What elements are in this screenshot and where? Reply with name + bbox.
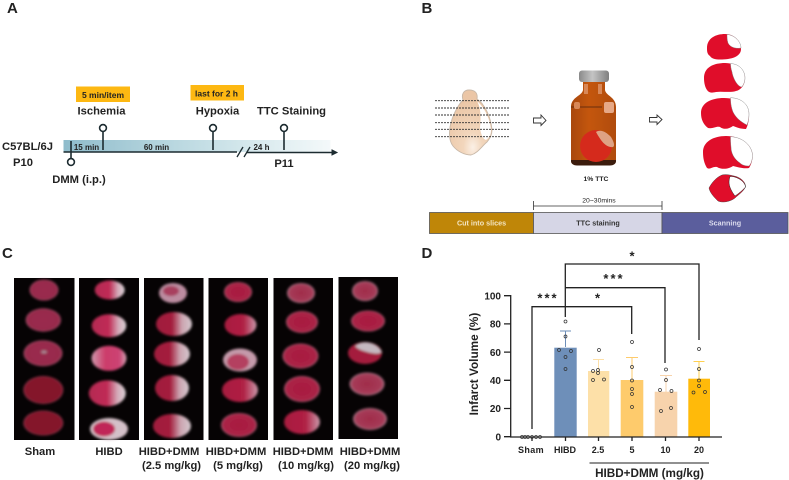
timeline labels: DMM (i.p.) (52, 174, 106, 186)
x tick labels: HIBD (554, 445, 576, 455)
group labels: (20 mg/kg) (344, 460, 400, 472)
arrow: to scans (650, 115, 662, 124)
group labels: HIBD (95, 446, 123, 458)
timeline labels: 24 h (253, 143, 270, 152)
slice 2 (704, 63, 745, 93)
timeline labels: Ischemia (78, 106, 126, 118)
photo column: HIBD+DMM 10 mg/kg (274, 278, 333, 440)
step: cut into slices (430, 212, 534, 234)
step: scanning: Scanning (709, 218, 741, 228)
x tick labels: 2.5 (592, 445, 604, 455)
group labels: (10 mg/kg) (278, 460, 334, 472)
timeline labels: 15 min (74, 143, 99, 152)
duration bracket (534, 198, 662, 210)
callout: last for 2 h (190, 85, 244, 100)
icon: whole brain with slicing lines (435, 90, 509, 155)
data points (520, 320, 706, 438)
photo column: Sham (14, 278, 74, 440)
group labels: HIBD+DMM (340, 446, 400, 458)
y tick labels: 100 (484, 292, 501, 302)
significance stars: *** (537, 290, 559, 306)
group labels: HIBD+DMM (206, 446, 266, 458)
photo column: HIBD+DMM 2.5 mg/kg (144, 278, 204, 440)
group labels: HIBD+DMM (273, 446, 333, 458)
timeline labels: 60 min (144, 143, 169, 152)
error bars (560, 331, 704, 392)
y tick labels: 80 (490, 320, 501, 330)
step: TTC staining (534, 212, 662, 234)
panel letter B: B (422, 0, 432, 17)
timeline labels: TTC Staining (257, 106, 326, 118)
callout: last for 2 h: last for 2 h (195, 88, 238, 98)
y tick labels: 20 (490, 404, 501, 415)
slice 4 (703, 136, 752, 169)
group underline and label (590, 463, 709, 480)
group underline and label: HIBD+DMM (mg/kg) (595, 467, 704, 480)
step: scanning (662, 212, 788, 234)
arrow: to bottle (534, 115, 546, 126)
photo column: HIBD+DMM 20 mg/kg (338, 277, 398, 439)
panel B: TTC staining workflow (422, 0, 788, 234)
pin: DMM injection (68, 141, 74, 165)
bars (554, 348, 710, 437)
y axis title: Infarct Volume (%) (467, 313, 481, 415)
significance brackets (532, 264, 699, 429)
pin: TTC staining (281, 125, 287, 150)
timeline labels: P11 (274, 158, 294, 170)
y tick labels (484, 292, 501, 444)
slice 5 (709, 175, 746, 202)
timeline labels: Hypoxia (196, 106, 240, 118)
callout: 5 min/item (76, 86, 130, 102)
pin: ischemia (100, 125, 106, 150)
icon: stained slices (701, 34, 752, 202)
significance stars (537, 248, 635, 306)
step: cut into slices: Cut into slices (457, 218, 506, 228)
x tick labels: 5 (629, 445, 635, 455)
bottle label: 1% TTC (584, 176, 609, 183)
panel D: infarct volume bar chart (422, 245, 722, 480)
panel letter A: A (7, 0, 18, 17)
panel C: brain slice photographs (2, 245, 400, 472)
timeline labels (2, 106, 326, 186)
slice 1 (707, 34, 741, 60)
icon: TTC bottle (571, 70, 616, 166)
photo column: HIBD+DMM 5 mg/kg (208, 278, 268, 440)
step: TTC staining: TTC staining (576, 218, 620, 228)
slice 3 (701, 98, 749, 129)
group labels: (2.5 mg/kg) (142, 460, 201, 472)
x tick labels (518, 445, 704, 455)
group labels: Sham (25, 446, 55, 458)
pin: hypoxia (210, 125, 216, 150)
x tick labels: Sham (518, 445, 544, 455)
x tick labels: 20 (694, 445, 704, 455)
x tick labels: 10 (660, 445, 671, 455)
group labels: HIBD+DMM (139, 446, 199, 458)
y tick labels: 0 (495, 432, 501, 444)
significance stars: * (629, 248, 635, 264)
timeline labels: C57BL/6J (2, 141, 53, 153)
y tick labels: 40 (490, 376, 501, 387)
panel letter D: D (422, 245, 432, 262)
timeline labels: P10 (13, 157, 33, 169)
group labels (25, 446, 400, 472)
panel A: experimental timeline (2, 0, 337, 186)
duration bracket: 20~30mins (582, 198, 616, 204)
callout: 5 min/item: 5 min/item (82, 90, 124, 100)
timeline axis with break and arrow (64, 147, 337, 157)
photo column: HIBD (79, 278, 139, 440)
axes and ticks (504, 295, 722, 441)
significance stars: * (595, 290, 601, 306)
significance stars: *** (603, 271, 625, 286)
group labels: (5 mg/kg) (213, 460, 263, 472)
timeline gradient band (64, 140, 330, 152)
y tick labels: 60 (490, 348, 501, 359)
panel letter C: C (2, 245, 13, 262)
